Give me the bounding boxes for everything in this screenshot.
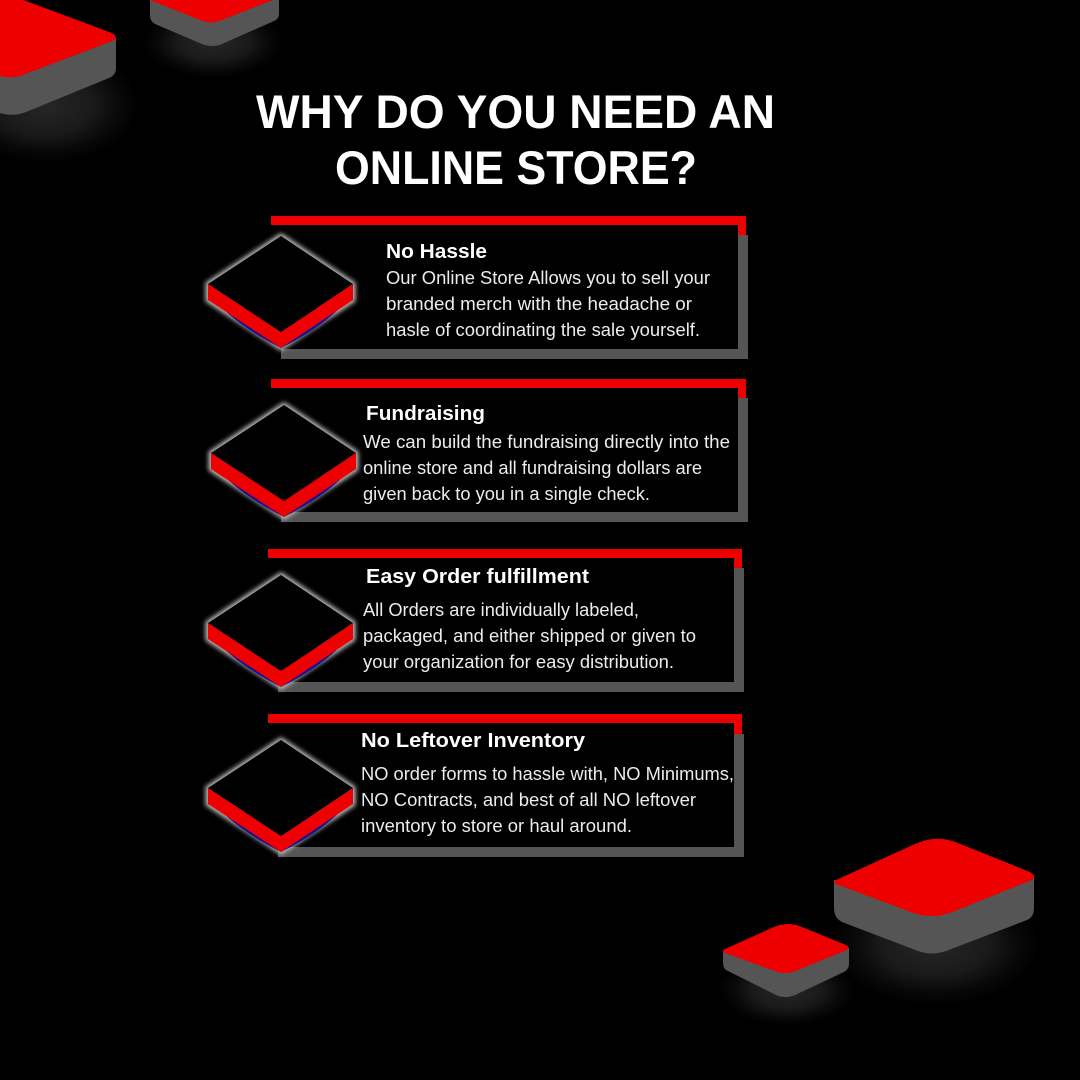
- panel frame: [271, 379, 748, 522]
- title: WHY DO YOU NEED AN: [256, 85, 775, 138]
- icon: diamond tile: [208, 740, 353, 852]
- heading: Easy Order fulfillment: [366, 566, 589, 588]
- decorative block: bottom right large: [830, 839, 1040, 1005]
- text block: hasle of coordinating the sale yourself.: [386, 320, 700, 340]
- text block: All Orders are individually labeled,: [363, 600, 639, 620]
- panel: Easy Order fulfillment: [208, 549, 744, 692]
- text block: [363, 600, 696, 672]
- title: ONLINE STORE?: [335, 141, 697, 194]
- heading: No Leftover Inventory: [361, 730, 586, 752]
- panel: Fundraising: [211, 379, 748, 522]
- text block: NO order forms to hassle with, NO Minimums,: [361, 764, 734, 784]
- text block: Our Online Store Allows you to sell your: [386, 268, 710, 288]
- text block: NO Contracts, and best of all NO leftover: [361, 790, 696, 810]
- icon: diamond tile: [208, 575, 353, 687]
- text block: given back to you in a single check.: [363, 484, 650, 504]
- panel frame: [268, 549, 744, 692]
- decorative block: top centre: [143, 0, 283, 78]
- icon: diamond tile: [211, 405, 356, 517]
- title: [256, 85, 775, 194]
- panel: No Leftover Inventory: [208, 714, 744, 857]
- text block: online store and all fundraising dollars are: [363, 458, 702, 478]
- text block: your organization for easy distribution.: [363, 652, 674, 672]
- text block: packaged, and either shipped or given to: [363, 626, 696, 646]
- heading: Fundraising: [366, 403, 485, 425]
- text block: We can build the fundraising directly into the: [363, 432, 730, 452]
- panel frame: [268, 714, 744, 857]
- panel: No Hassle: [208, 216, 748, 359]
- text block: [363, 432, 730, 504]
- text block: [361, 764, 734, 836]
- decorative block: top left: [0, 0, 140, 163]
- text block: [386, 268, 710, 340]
- decorative block: bottom right small: [719, 924, 855, 1026]
- heading: No Hassle: [386, 241, 487, 263]
- panel frame: [271, 216, 748, 359]
- text block: branded merch with the headache or: [386, 294, 692, 314]
- icon: diamond tile: [208, 236, 353, 348]
- text block: inventory to store or haul around.: [361, 816, 632, 836]
